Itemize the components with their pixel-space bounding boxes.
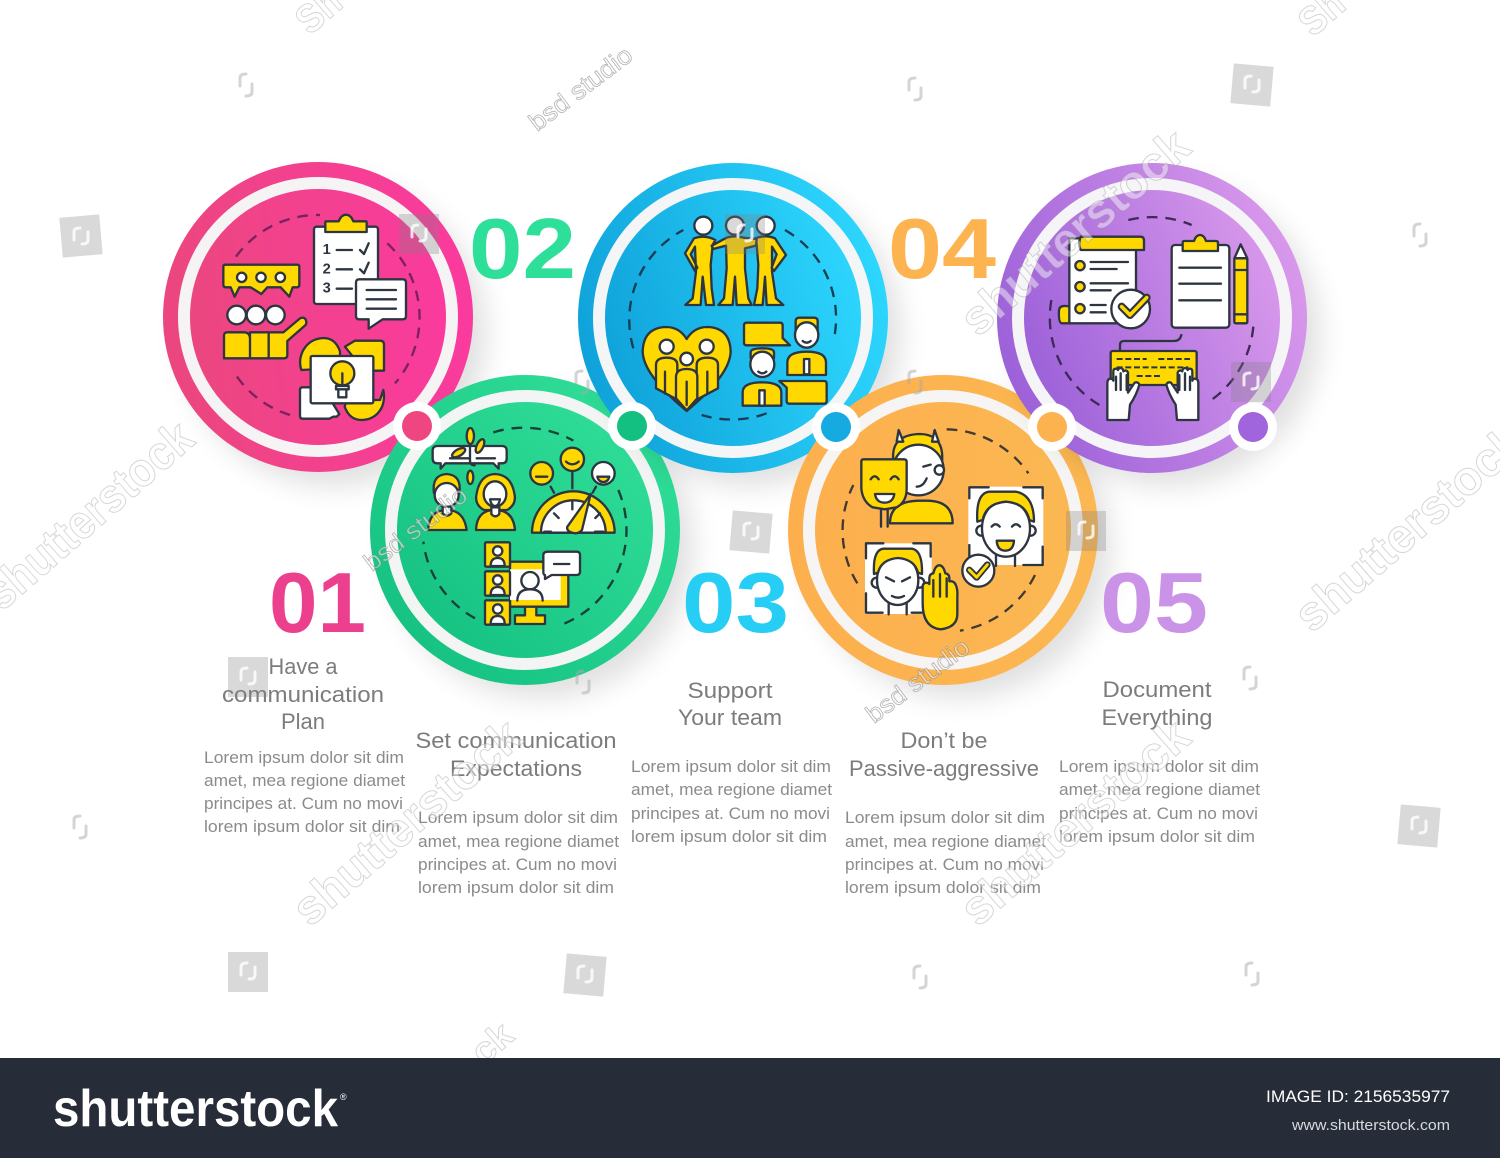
node: pink connector	[393, 402, 441, 450]
text block: step 1: amet, mea regione diamet	[204, 772, 405, 790]
text block: step 2: amet, mea regione diamet	[418, 833, 619, 851]
text block: step 3: Lorem ipsum dolor sit dim	[631, 758, 831, 776]
text block: step 3: principes at. Cum no movi	[631, 805, 830, 823]
text block: step 5: Lorem ipsum dolor sit dim	[1059, 758, 1259, 776]
watermarks: shutterstock	[950, 709, 1201, 936]
footer bar	[0, 1058, 1500, 1158]
icon: document everything	[1050, 217, 1253, 420]
text block: step 4: lorem ipsum dolor sit dim	[845, 879, 1041, 897]
text block: step 5: lorem ipsum dolor sit dim	[1059, 828, 1255, 846]
node: purple connector	[1229, 403, 1277, 451]
text block: step 1: communication	[222, 682, 384, 707]
text block: step 1: Plan	[281, 709, 325, 734]
panel: step 5 circle	[997, 163, 1320, 486]
text block: step 1: Lorem ipsum dolor sit dim	[204, 749, 404, 767]
text block: step 4: Lorem ipsum dolor sit dim	[845, 809, 1045, 827]
text block: step 5	[1059, 677, 1260, 846]
text block: step 2: lorem ipsum dolor sit dim	[418, 879, 614, 897]
text block: step 4	[845, 728, 1046, 897]
text block: step 4: amet, mea regione diamet	[845, 833, 1046, 851]
text block: step 1: principes at. Cum no movi	[204, 795, 403, 813]
node: blue connector	[812, 403, 860, 451]
number 01: 01	[269, 556, 366, 651]
icon: communication plan: 2	[323, 261, 331, 277]
number 02: 02	[469, 202, 576, 297]
number 03: 03	[682, 556, 789, 651]
text block: step 4: Don’t be	[900, 728, 988, 753]
panel: step 2 circle	[370, 375, 693, 698]
watermarks: shutterstock	[282, 709, 533, 936]
panel: step 4 circle	[788, 375, 1111, 698]
icon: support team	[629, 217, 836, 420]
text block: step 2: Expectations	[450, 756, 582, 781]
node: orange connector	[1028, 403, 1076, 451]
icon: communication plan	[223, 215, 420, 420]
icon: communication plan: 1	[323, 242, 331, 258]
logo trademark: ®	[340, 1092, 347, 1102]
text block: step 1	[204, 654, 405, 836]
watermarks: bsd studio	[524, 41, 638, 137]
website: www.shutterstock.com	[1291, 1118, 1450, 1134]
logo: shutterstock: shutterstock	[53, 1080, 338, 1138]
text block: step 5: amet, mea regione diamet	[1059, 781, 1260, 799]
number 05: 05	[1100, 556, 1208, 651]
text block: step 5: Document	[1102, 677, 1212, 702]
icon: passive-aggressive masks	[843, 429, 1043, 631]
text block: step 3: Your team	[678, 705, 782, 730]
text block: step 3: lorem ipsum dolor sit dim	[631, 828, 827, 846]
icon: set expectations	[423, 428, 626, 625]
text block: step 1: Have a	[268, 654, 338, 679]
watermarks: ck	[462, 1013, 522, 1072]
text block: step 1: lorem ipsum dolor sit dim	[204, 818, 400, 836]
text block: step 2: principes at. Cum no movi	[418, 856, 617, 874]
watermarks: bsd studio	[861, 633, 975, 729]
icon: communication plan: 3	[323, 281, 331, 297]
number 04: 04	[888, 202, 996, 297]
text block: step 2	[416, 728, 619, 897]
text block: step 3: Support	[688, 678, 772, 703]
text block: step 4: principes at. Cum no movi	[845, 856, 1044, 874]
text block: step 5: Everything	[1102, 705, 1212, 730]
text block: step 2: Set communication	[416, 728, 616, 753]
image id: IMAGE ID: 2156535977	[1266, 1088, 1450, 1106]
text block: step 3: amet, mea regione diamet	[631, 781, 832, 799]
panel: step 3 circle	[578, 163, 901, 486]
text block: step 4: Passive-aggressive	[849, 756, 1039, 781]
text block: step 5: principes at. Cum no movi	[1059, 805, 1258, 823]
panel: step 1 circle	[163, 162, 486, 486]
text block: step 3	[631, 678, 832, 846]
watermarks: bsd studio	[359, 481, 473, 577]
text block: step 2: Lorem ipsum dolor sit dim	[418, 809, 618, 827]
watermarks: shutterstock	[950, 119, 1201, 346]
node: green connector	[608, 402, 656, 450]
